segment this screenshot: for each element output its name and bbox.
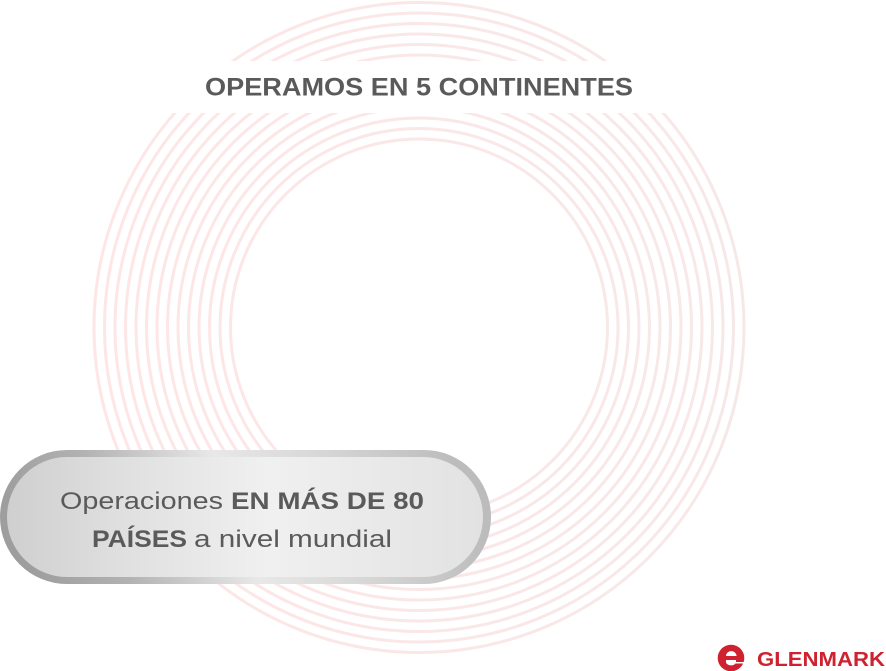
pill fill xyxy=(7,457,483,577)
callout text line 2: a nivel mundial xyxy=(194,526,392,553)
pill border xyxy=(0,450,491,584)
title band xyxy=(150,61,690,113)
title: OPERAMOS EN 5 CONTINENTES xyxy=(205,74,633,102)
callout text line 1: Operaciones xyxy=(60,488,223,515)
callout pill xyxy=(0,450,491,584)
callout text line 1: EN MÁS DE 80 xyxy=(231,487,424,515)
concentric pink rings xyxy=(94,2,744,652)
Glenmark logo xyxy=(718,645,885,671)
callout text line 2 xyxy=(92,525,392,553)
callout text line 2: PAÍSES xyxy=(92,525,187,553)
callout text line 1 xyxy=(60,487,424,515)
logo wordmark: GLENMARK xyxy=(757,648,885,671)
logo icon xyxy=(718,645,745,671)
